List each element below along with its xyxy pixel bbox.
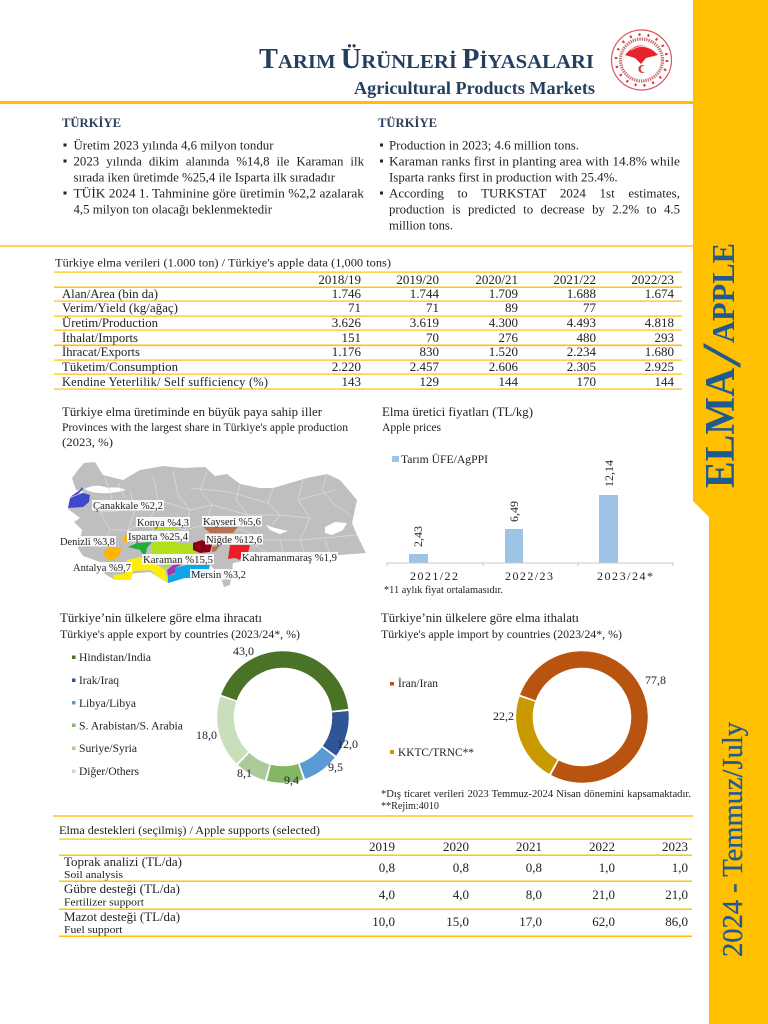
table: apple data: 143 (342, 374, 361, 389)
legend: export: S. Arabistan/S. Arabia (79, 720, 183, 732)
bar chart: apple prices: 6,49 (507, 501, 521, 522)
heading: import: Türkiye's apple import by countries (2023/24*, %) (381, 628, 622, 641)
table: apple data: 2022/23 (631, 272, 674, 287)
map labels: Kahramanmaraş %1,9 (242, 552, 337, 564)
table: apple data: 3.626 (332, 315, 362, 330)
table: apple data: 1.746 (332, 286, 362, 301)
panel: English summary (378, 116, 680, 232)
table: apple data: 293 (654, 330, 674, 345)
table: apple data: Tüketim/Consumption (62, 360, 178, 374)
table: apple data: 2.606 (489, 359, 518, 374)
table: apple data: 89 (505, 300, 518, 315)
donut chart: import: 77,8 (645, 673, 666, 687)
legend: export: Suriye/Syria (79, 743, 137, 755)
table: supports: 86,0 (665, 914, 688, 929)
legend: import: KKTC/TRNC** (398, 747, 474, 759)
panel: Turkish summary: 2023 yılında dikim alanında %14,8 ile Karaman ilk (74, 154, 365, 168)
table: apple data: İthalat/Imports (62, 331, 138, 345)
table: supports: 0,8 (453, 860, 469, 875)
donut chart: import: 22,2 (493, 709, 514, 723)
table: supports: 2021 (516, 839, 542, 854)
panel: Turkish summary: TÜRKİYE (62, 116, 121, 130)
sidebar date: 2024 - Temmuz/July: 2024 - Temmuz/July (718, 722, 749, 957)
title: TARIM ÜRÜNLERİ PİYASALARI (259, 44, 594, 75)
table: apple data: 2.234 (567, 344, 596, 359)
table: apple data: Kendine Yeterlilik/ Self sufficiency (%) (62, 375, 268, 389)
sidebar title: ELMA/APPLE: APPLE (705, 243, 741, 343)
legend: import: İran/Iran (398, 678, 438, 690)
table: supports: 2019 (369, 839, 395, 854)
table: supports: 8,0 (526, 887, 542, 902)
donut chart: export: 8,1 (237, 766, 252, 780)
icon: ministry logo (612, 30, 672, 90)
legend: export: Libya/Libya (79, 698, 136, 710)
legend: export: Diğer/Others (79, 766, 140, 778)
map: Türkiye provinces (59, 462, 366, 587)
table: apple data: 2.305 (567, 359, 596, 374)
table: apple data: 4.818 (645, 315, 674, 330)
heading: import: Türkiye’nin ülkelere göre elma ithalatı (381, 611, 580, 625)
donut chart: export: 18,0 (196, 728, 217, 742)
map labels: Çanakkale %2,2 (93, 500, 163, 512)
map labels: Karaman %15,5 (143, 554, 213, 566)
table: apple data (54, 272, 682, 390)
sidebar title: ELMA/APPLE: / (691, 342, 752, 368)
panel: English summary: production is predicted to decrease by 2.2% to 4.5 (389, 202, 680, 216)
sidebar title: ELMA/APPLE: ELMA (698, 367, 744, 488)
panel: English summary: Production in 2023; 4.6 million tons. (389, 138, 579, 152)
table caption: apple data: Türkiye elma verileri (1.000 ton) / Türkiye's apple data (1,000 tons) (55, 256, 391, 270)
map labels: Isparta %25,4 (128, 531, 188, 543)
table: apple data: 1.176 (332, 344, 362, 359)
table: apple data: 1.709 (489, 286, 518, 301)
table: apple data: 170 (576, 374, 596, 389)
table: supports: 2020 (443, 839, 469, 854)
top rule (0, 101, 693, 104)
table: apple data: 480 (576, 330, 596, 345)
table: apple data: 4.300 (489, 315, 518, 330)
heading: provinces map: Türkiye elma üretiminde en büyük paya sahip iller (62, 405, 322, 419)
legend: export: Hindistan/India (79, 652, 151, 664)
bar chart: apple prices: 2023/24* (597, 569, 653, 583)
legend: import (390, 678, 474, 759)
heading: export: Türkiye's apple export by countries (2023/24*, %) (60, 628, 300, 641)
table: apple data: 71 (426, 300, 439, 315)
donut chart: export: 9,4 (284, 773, 299, 787)
panel: English summary: TÜRKİYE (378, 116, 437, 130)
bar chart: apple prices: 2022/23 (505, 569, 553, 583)
heading: apple prices: Apple prices (382, 422, 442, 434)
panel: English summary: Karaman ranks first in planting area with 14.8% while (389, 154, 680, 168)
legend: AgPPI: Tarım ÜFE/AgPPI (401, 452, 488, 466)
heading: apple prices: Elma üretici fiyatları (TL/kg) (382, 405, 533, 419)
heading: provinces map: Provinces with the largest share in Türkiye's apple production (62, 422, 348, 434)
table: supports: 21,0 (665, 887, 688, 902)
table: apple data: 1.674 (645, 286, 674, 301)
table: apple data: 71 (348, 300, 361, 315)
table: supports: Fuel support (64, 924, 122, 936)
table: apple data: 77 (583, 300, 596, 315)
table: supports (59, 838, 692, 937)
table: apple data: Verim/Yield (kg/ağaç) (62, 301, 178, 315)
table: supports: Fertilizer support (64, 896, 144, 908)
table: supports: 0,8 (526, 860, 542, 875)
heading: export (60, 611, 300, 641)
table: apple data: 1.680 (645, 344, 674, 359)
map labels: Konya %4,3 (137, 517, 189, 529)
panel: Turkish summary: sırada iken üretimde %25,4 ile Isparta ilk sıradadır (74, 170, 335, 184)
table: apple data: 2020/21 (475, 272, 518, 287)
panel: Turkish summary: 4,5 milyon ton olacağı beklenmektedir (74, 202, 272, 216)
table: supports: 21,0 (592, 887, 615, 902)
panel: Turkish summary: Üretim 2023 yılında 4,6 milyon tondur (74, 138, 274, 152)
table: supports: 17,0 (519, 914, 542, 929)
bar chart: apple prices (387, 452, 673, 583)
panel: English summary: million tons. (389, 218, 453, 232)
legend: export: Irak/Iraq (79, 675, 119, 687)
footnote: trade data: **Rejim:4010 (381, 801, 439, 812)
bar chart: apple prices: 2021/22 (410, 569, 458, 583)
heading: import (381, 611, 622, 641)
table: supports: 4,0 (379, 887, 395, 902)
map labels: Mersin %3,2 (191, 569, 246, 581)
footnote: trade data (381, 789, 691, 812)
heading: apple prices (382, 405, 533, 434)
panel: Turkish summary (62, 116, 365, 216)
map labels: Denizli %3,8 (60, 536, 115, 548)
footnote: prices: *11 aylık fiyat ortalamasıdır. (384, 585, 503, 596)
panel: Turkish summary: TÜİK 2024 1. Tahminine göre üretimin %2,2 azalarak (74, 186, 365, 200)
table: supports: 62,0 (592, 914, 615, 929)
table: supports: 1,0 (672, 860, 688, 875)
donut chart: export (196, 643, 358, 791)
table: apple data: 144 (654, 374, 674, 389)
table: supports: 0,8 (379, 860, 395, 875)
table: apple data: 151 (342, 330, 361, 345)
legend: export (72, 652, 183, 778)
table: apple data: 1.744 (410, 286, 440, 301)
table: apple data: 2021/22 (553, 272, 596, 287)
table: supports: Soil analysis (64, 869, 123, 881)
map labels: Antalya %9,7 (73, 562, 131, 574)
subtitle: Agricultural Products Markets (354, 78, 595, 98)
table: supports: 4,0 (453, 887, 469, 902)
table: supports: Toprak analizi (TL/da) (64, 855, 182, 869)
sidebar band (691, 0, 768, 1024)
donut chart: import (493, 643, 666, 791)
donut chart: export: 12,0 (337, 737, 358, 751)
footnote: trade data: *Dış ticaret verileri 2023 Temmuz-2024 Nisan dönemini kapsamaktadır. (381, 789, 691, 800)
map labels: Kayseri %5,6 (203, 516, 261, 528)
bar chart: apple prices: 2,43 (411, 526, 425, 547)
table: supports: 2022 (589, 839, 615, 854)
donut chart: export: 9,5 (328, 760, 343, 774)
table: apple data: Alan/Area (bin da) (62, 287, 158, 301)
table: apple data: 2.925 (645, 359, 674, 374)
table: apple data: İhracat/Exports (62, 345, 140, 359)
table: apple data: 4.493 (567, 315, 596, 330)
panel: English summary: Isparta ranks first in production with 25.4%. (389, 170, 618, 184)
map labels (59, 500, 338, 581)
heading: export: Türkiye’nin ülkelere göre elma ihracatı (60, 611, 263, 625)
table: apple data: 3.619 (410, 315, 439, 330)
table: apple data: 2.457 (410, 359, 440, 374)
bar chart: apple prices: 12,14 (602, 460, 616, 487)
table: apple data: 2019/20 (396, 272, 439, 287)
table: supports: 15,0 (446, 914, 469, 929)
table: apple data: 830 (420, 344, 439, 359)
heading: provinces map: (2023, %) (62, 437, 113, 449)
table: apple data: Üretim/Production (62, 316, 158, 330)
sidebar title: ELMA/APPLE (691, 243, 752, 488)
donut chart: export: 43,0 (233, 644, 254, 658)
table: apple data: 2.220 (332, 359, 361, 374)
table: apple data: 129 (420, 374, 439, 389)
table: supports: 2023 (662, 839, 688, 854)
table: supports: 1,0 (599, 860, 615, 875)
map labels: Niğde %12,6 (206, 534, 262, 546)
table: apple data: 2018/19 (318, 272, 361, 287)
table: apple data: 70 (426, 330, 439, 345)
table: apple data: 144 (498, 374, 518, 389)
heading: provinces map (62, 405, 348, 449)
table: apple data: 1.520 (489, 344, 518, 359)
table: apple data: 1.688 (567, 286, 596, 301)
table: supports: 10,0 (372, 914, 395, 929)
table: supports: Mazot desteği (TL/da) (64, 910, 180, 924)
panel: English summary: According to TURKSTAT 2024 1st estimates, (389, 186, 680, 200)
table: apple data: 276 (498, 330, 518, 345)
table: supports: Gübre desteği (TL/da) (64, 882, 180, 896)
table caption: supports: Elma destekleri (seçilmiş) / Apple supports (selected) (59, 823, 320, 837)
